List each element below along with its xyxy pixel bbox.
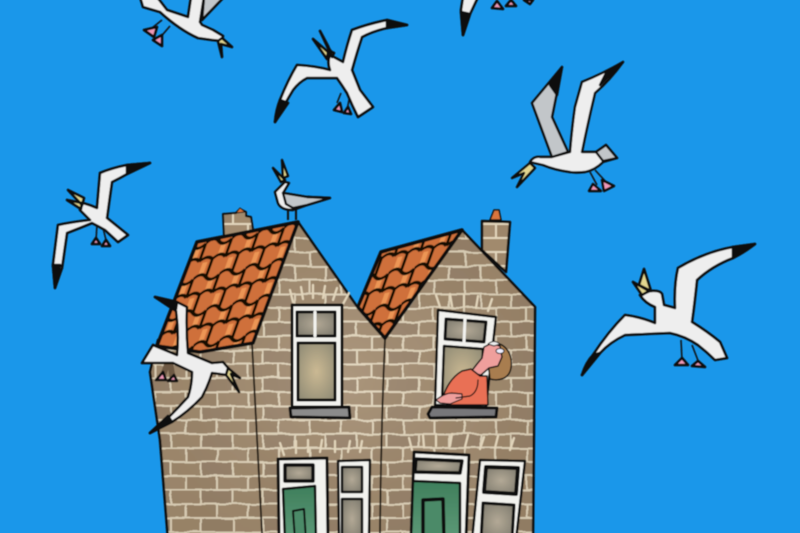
salmon sweater	[444, 369, 488, 405]
brick walls	[150, 222, 535, 533]
upper left window sill	[290, 407, 350, 418]
gull: perched on roof ridge	[273, 160, 330, 220]
left chimney	[223, 208, 254, 236]
gull: top centre	[461, 0, 533, 35]
gull: left	[53, 163, 150, 288]
door right	[411, 452, 469, 533]
door left	[278, 458, 328, 533]
sleeve line	[456, 380, 478, 398]
right chimney	[482, 210, 510, 272]
gull: top left	[140, 0, 232, 57]
narrow window left	[338, 460, 370, 533]
gull: right with grey wing	[512, 62, 623, 191]
hair	[488, 343, 511, 380]
eye	[496, 348, 504, 354]
person leaning out of window	[436, 342, 511, 405]
hair tuft	[488, 342, 500, 346]
upper right window sill	[428, 407, 497, 418]
brick arches above windows	[280, 285, 514, 455]
left tiled roof	[157, 222, 298, 352]
house group	[150, 208, 535, 533]
gull: large right	[582, 244, 755, 375]
gull: in front of house	[142, 297, 240, 433]
right tiled roof	[358, 230, 462, 338]
upper left window	[290, 305, 350, 418]
arm and hand	[436, 393, 462, 404]
narrow window right	[472, 460, 525, 533]
neck and face	[470, 343, 502, 375]
gull: upper centre	[275, 20, 407, 122]
upper right window	[428, 310, 497, 418]
